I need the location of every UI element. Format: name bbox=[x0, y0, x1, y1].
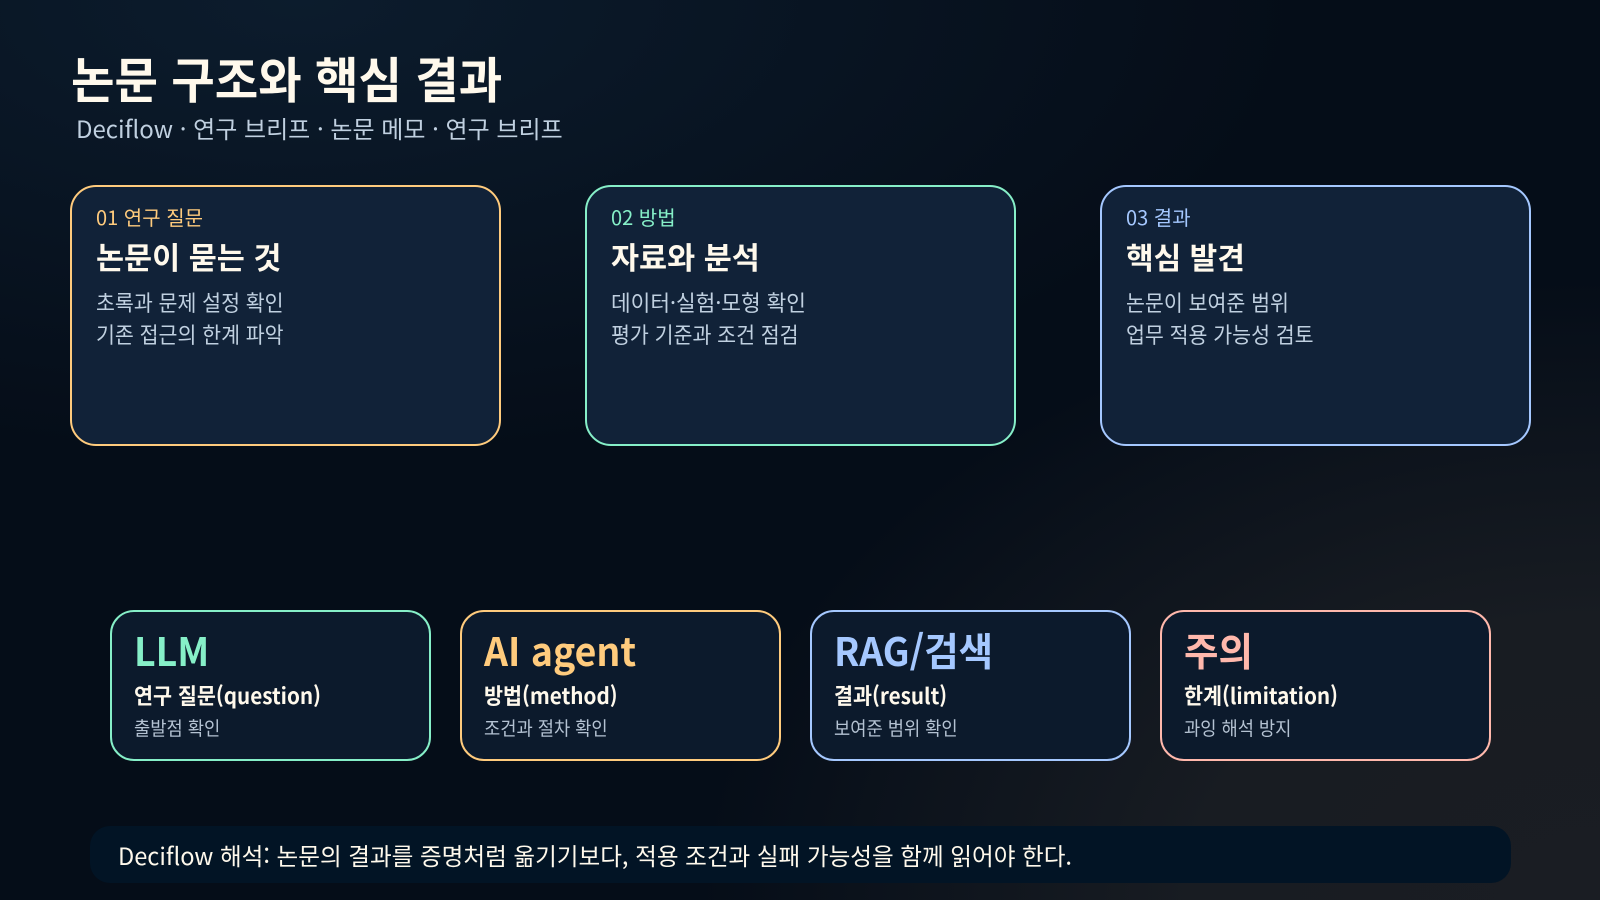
term: LLM bbox=[134, 622, 209, 678]
card heading: 핵심 발견 bbox=[1126, 234, 1245, 278]
panel: RAG search bbox=[810, 610, 1131, 761]
card body line 1: 초록과 문제 설정 확인 bbox=[96, 286, 284, 318]
panel: AI agent bbox=[460, 610, 781, 761]
card body line 2: 평가 기준과 조건 점검 bbox=[611, 318, 799, 350]
term: 주의 bbox=[1184, 622, 1253, 678]
panel: research question bbox=[70, 185, 501, 446]
subtitle: Deciflow · 연구 브리프 · 논문 메모 · 연구 브리프 bbox=[76, 110, 563, 145]
callout text: Deciflow 해석: 논문의 결과를 증명처럼 옮기기보다, 적용 조건과 실패 가능성을 함께 읽어야 한다. bbox=[118, 837, 1072, 872]
term note: 보여준 범위 확인 bbox=[834, 714, 958, 741]
term note: 조건과 절차 확인 bbox=[484, 714, 608, 741]
panel: method bbox=[585, 185, 1016, 446]
term role: 연구 질문(question) bbox=[134, 679, 321, 711]
term note: 출발점 확인 bbox=[134, 714, 220, 741]
panel: LLM bbox=[110, 610, 431, 761]
card body line 2: 기존 접근의 한계 파악 bbox=[96, 318, 284, 350]
card heading: 자료와 분석 bbox=[611, 234, 760, 278]
panel: caution bbox=[1160, 610, 1491, 761]
title: 논문 구조와 핵심 결과 bbox=[71, 42, 502, 113]
card label: 01 연구 질문 bbox=[96, 202, 203, 231]
card body line 2: 업무 적용 가능성 검토 bbox=[1126, 318, 1314, 350]
card label: 03 결과 bbox=[1126, 202, 1191, 231]
term role: 방법(method) bbox=[484, 679, 618, 711]
term: RAG/검색 bbox=[834, 622, 993, 678]
card body line 1: 논문이 보여준 범위 bbox=[1126, 286, 1289, 318]
panel: result bbox=[1100, 185, 1531, 446]
term role: 한계(limitation) bbox=[1184, 679, 1338, 711]
card body line 1: 데이터·실험·모형 확인 bbox=[611, 286, 806, 318]
card heading: 논문이 묻는 것 bbox=[96, 234, 281, 278]
term: AI agent bbox=[484, 622, 636, 678]
card label: 02 방법 bbox=[611, 202, 676, 231]
term note: 과잉 해석 방지 bbox=[1184, 714, 1291, 741]
callout: interpretation bbox=[90, 826, 1511, 883]
term role: 결과(result) bbox=[834, 679, 947, 711]
